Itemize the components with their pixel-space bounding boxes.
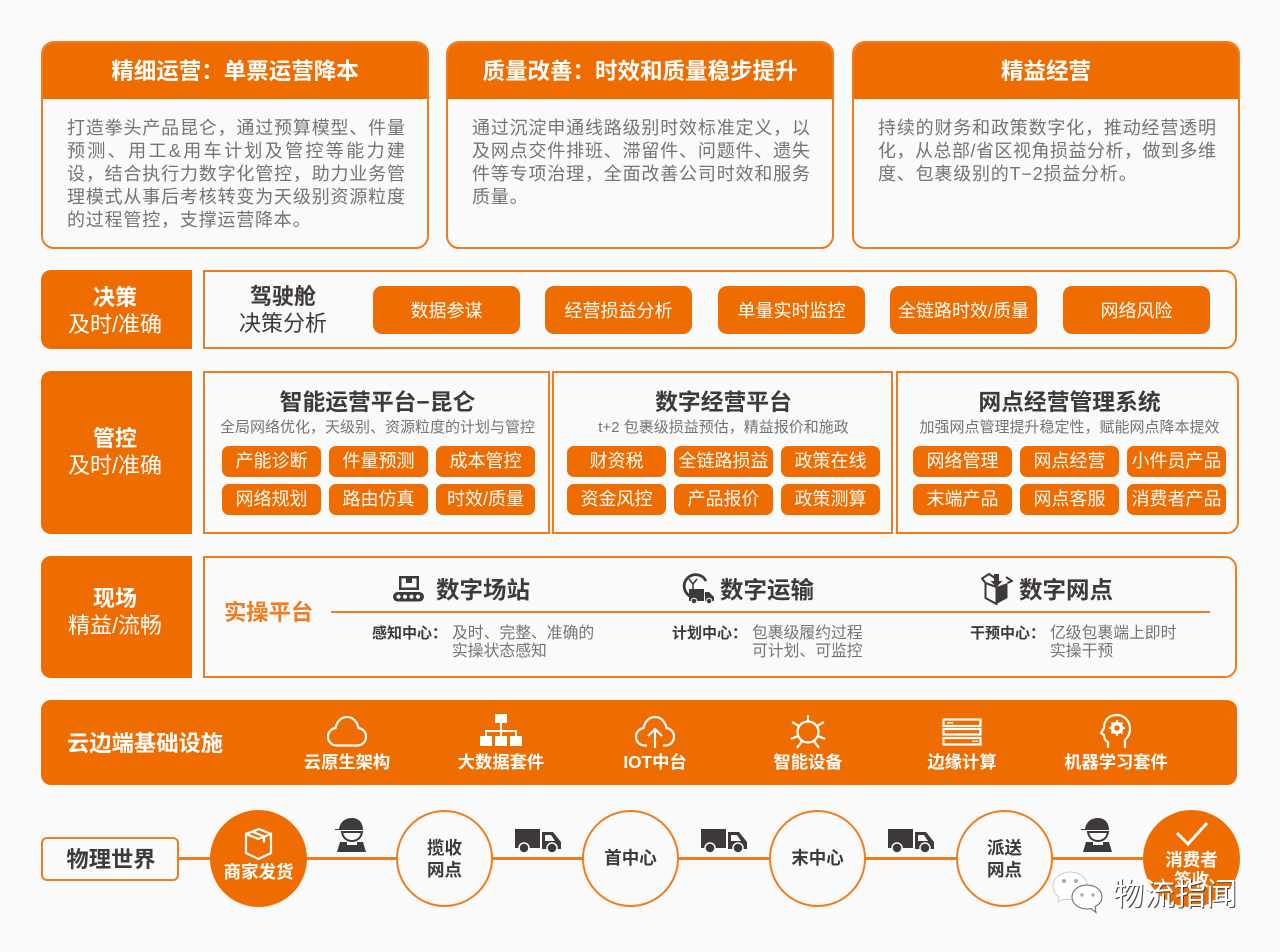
button: 财资税: 财资税 [590, 451, 644, 471]
label: 物理世界 [41, 837, 179, 881]
button: 政策测算: 政策测算 [794, 489, 866, 509]
button: 全链路时效/质量 [890, 286, 1037, 334]
button: 成本管控 [436, 446, 535, 477]
heading: 实操平台: 实操平台 [224, 600, 313, 625]
node: 揽收网点: 揽收 [427, 838, 462, 858]
button: 政策在线 [781, 446, 880, 477]
item: 云原生架构: 云原生架构 [304, 752, 390, 772]
item: 边缘计算: 边缘计算 [927, 752, 997, 772]
subtitle: 全局网络优化，天级别、资源粒度的计划与管控 [220, 418, 535, 436]
button: 产能诊断 [222, 446, 321, 477]
button: 小件员产品: 小件员产品 [1132, 451, 1222, 471]
node: 揽收网点: 网点 [427, 860, 462, 880]
row label: 管控: 及时/准确 [68, 453, 162, 478]
button: 网络规划: 网络规划 [236, 489, 308, 509]
text block: 质量改善说明: 及网点交件排班、滞留件、问题件、遗失 [472, 140, 810, 160]
node: 首中心 [582, 810, 679, 907]
heading: 数字运输: 数字运输 [720, 577, 814, 603]
node: 揽收网点 [396, 810, 493, 907]
button: 资金风控: 资金风控 [580, 489, 652, 509]
heading: 精细运营 [43, 43, 427, 99]
heading: 质量改善: 质量改善：时效和质量稳步提升 [482, 59, 798, 84]
button: 产品报价 [674, 484, 773, 515]
text block: 精细运营说明: 预测、用工&用车计划及管控等能力建 [67, 140, 405, 160]
text block: 精细运营说明: 理模式从事后考核转变为天级别资源粒度 [67, 186, 405, 206]
row label: 现场: 现场 [93, 586, 137, 611]
button: 时效/质量: 时效/质量 [447, 489, 524, 509]
button: 网络风险: 网络风险 [1100, 301, 1172, 321]
text: 感知中心: 及时、完整、准确的 [452, 625, 594, 642]
button: 经营损益分析: 经营损益分析 [564, 301, 672, 321]
text: 计划中心 [672, 624, 863, 660]
button: 消费者产品: 消费者产品 [1132, 489, 1222, 509]
heading: 数字网点: 数字网点 [1019, 577, 1113, 603]
heading: 质量改善 [448, 43, 832, 99]
panel: 实操平台 [203, 556, 1237, 678]
item: 云原生架构 [304, 716, 390, 772]
node: 末中心 [769, 810, 866, 907]
panel: 数字经营平台 [552, 371, 893, 534]
text: 感知中心: 实操状态感知 [452, 643, 547, 660]
text: 干预中心: 实操干预 [1050, 643, 1113, 660]
icon: package [244, 828, 272, 860]
icon: check mark [1176, 822, 1208, 846]
item: IOT中台 [623, 716, 687, 772]
text block: 质量改善说明: 件等专项治理，全面改善公司时效和服务 [472, 164, 810, 184]
heading: 精益经营 [854, 43, 1238, 99]
button: 路由仿真: 路由仿真 [342, 489, 414, 509]
text block: 精细运营说明 [67, 118, 405, 230]
text: 物流指闻: 物流指闻 [1113, 877, 1237, 912]
button: 数据参谋 [373, 286, 520, 334]
button: 网点客服: 网点客服 [1034, 489, 1106, 509]
panel: 质量改善 [446, 41, 834, 249]
icon: wechat [1052, 872, 1102, 914]
heading: 网点经营管理系统: 网点经营管理系统 [978, 389, 1161, 415]
item: 机器学习套件 [1064, 714, 1168, 772]
node: 首中心: 首中心 [604, 848, 657, 868]
heading: 云边端基础设施: 云边端基础设施 [67, 731, 223, 756]
panel: 驾驶舱决策分析 [203, 270, 1237, 349]
text block: 精益经营说明 [878, 118, 1216, 184]
node: 消费者签收: 签收 [1174, 870, 1209, 890]
subtitle: 加强网点管理提升稳定性，赋能网点降本提效 [919, 418, 1220, 436]
button: 政策测算 [781, 484, 880, 515]
text: 感知中心 [372, 624, 594, 660]
icon: parcel box [981, 573, 1013, 605]
button: 产能诊断: 产能诊断 [236, 451, 308, 471]
button: 网点客服 [1020, 484, 1119, 515]
icon: truck 3 [888, 829, 934, 852]
button: 时效/质量 [436, 484, 535, 515]
label: 物理世界: 物理世界 [66, 847, 156, 872]
heading: 精细运营: 精细运营：单票运营降本 [111, 59, 359, 84]
heading: 驾驶舱: 驾驶舱 [250, 284, 316, 309]
text: 干预中心: 干预中心： [970, 625, 1045, 642]
button: 财资税 [567, 446, 666, 477]
icon: courier 1 [335, 818, 366, 852]
button: 件量预测: 件量预测 [342, 451, 414, 471]
row label: 管控: 管控 [93, 426, 137, 451]
text block: 精益经营说明: 化，从总部/省区视角损益分析，做到多维 [878, 140, 1216, 160]
text: 计划中心: 包裹级履约过程 [752, 625, 863, 642]
text block: 精细运营说明: 打造拳头产品昆仑，通过预算模型、件量 [67, 118, 405, 138]
row label: 决策: 决策 [93, 285, 137, 310]
watermark: 物流指闻 [1052, 872, 1237, 914]
text: 干预中心 [970, 624, 1176, 660]
text: 计划中心: 计划中心： [672, 625, 747, 642]
icon: delivery clock [682, 573, 714, 604]
node: 商家发货: 商家发货 [224, 862, 294, 882]
icon: conveyor [393, 576, 424, 602]
subtitle: t+2 包裹级损益预估，精益报价和施政 [598, 418, 849, 436]
node: 末中心: 末中心 [791, 848, 844, 868]
text block: 质量改善说明: 质量。 [472, 186, 528, 206]
button: 件量预测 [329, 446, 428, 477]
button: 全链路损益 [674, 446, 773, 477]
row label: 管控 [41, 371, 192, 534]
button: 数据参谋: 数据参谋 [410, 301, 482, 321]
panel: 精细运营 [41, 41, 429, 249]
text: 感知中心: 感知中心： [372, 625, 447, 642]
text block: 精细运营说明: 的过程管控，支撑运营降本。 [67, 210, 311, 230]
icon: truck 2 [701, 829, 747, 852]
node: 派送网点: 派送 [987, 838, 1022, 858]
heading: 精益经营: 精益经营 [1001, 59, 1091, 84]
text: 计划中心: 可计划、可监控 [752, 643, 863, 660]
button: 单量实时监控 [718, 286, 865, 334]
row label: 决策: 及时/准确 [68, 312, 162, 337]
button: 全链路时效/质量: 全链路时效/质量 [898, 301, 1029, 321]
heading: 智能运营平台-昆仑: 智能运营平台−昆仑 [280, 389, 475, 415]
button: 网络管理: 网络管理 [926, 451, 998, 471]
heading: 数字场站: 数字场站 [436, 577, 530, 603]
item: 机器学习套件: 机器学习套件 [1064, 752, 1168, 772]
button: 政策在线: 政策在线 [794, 451, 866, 471]
button: 末端产品 [913, 484, 1012, 515]
row label: 现场 [41, 556, 192, 678]
button: 网络风险 [1063, 286, 1210, 334]
button: 经营损益分析 [545, 286, 692, 334]
button: 网络规划 [222, 484, 321, 515]
button: 网络管理 [913, 446, 1012, 477]
button: 网点经营: 网点经营 [1034, 451, 1106, 471]
text block: 质量改善说明: 通过沉淀申通线路级别时效标准定义，以 [472, 118, 810, 138]
button: 路由仿真 [329, 484, 428, 515]
item: 智能设备: 智能设备 [773, 752, 843, 772]
text block: 质量改善说明 [472, 118, 810, 206]
heading: 数字经营平台: 数字经营平台 [655, 389, 792, 415]
text block: 精细运营说明: 设，结合执行力数字化管控，助力业务管 [67, 164, 405, 184]
icon: courier 2 [1081, 818, 1112, 852]
text: 干预中心: 亿级包裹端上即时 [1050, 625, 1176, 642]
button: 小件员产品 [1127, 446, 1226, 477]
button: 资金风控 [567, 484, 666, 515]
text block: 精益经营说明: 持续的财务和政策数字化，推动经营透明 [878, 118, 1216, 138]
button: 消费者产品 [1127, 484, 1226, 515]
button: 网点经营 [1020, 446, 1119, 477]
panel: 精益经营 [852, 41, 1240, 249]
panel: 云边端基础设施 [41, 700, 1237, 785]
panel: 网点经营管理系统 [896, 371, 1239, 534]
button: 全链路损益: 全链路损益 [678, 451, 768, 471]
button: 产品报价: 产品报价 [688, 489, 760, 509]
heading: 决策分析: 决策分析 [239, 311, 327, 336]
node: 消费者签收: 消费者 [1165, 850, 1218, 870]
button: 末端产品: 末端产品 [926, 489, 998, 509]
button: 单量实时监控: 单量实时监控 [738, 301, 846, 321]
node: 商家发货 [210, 810, 307, 907]
node: 派送网点: 网点 [987, 860, 1022, 880]
button: 成本管控: 成本管控 [450, 451, 522, 471]
item: IOT中台: IOT中台 [623, 752, 687, 772]
item: 大数据套件: 大数据套件 [458, 752, 544, 772]
node: 派送网点 [956, 810, 1053, 907]
item: 智能设备 [773, 715, 843, 772]
node: 消费者签收 [1143, 810, 1240, 907]
row label: 现场: 精益/流畅 [68, 613, 162, 638]
row label: 决策 [41, 270, 192, 349]
item: 大数据套件 [458, 714, 544, 772]
panel: 智能运营平台 [203, 371, 550, 534]
text block: 精益经营说明: 度、包裹级别的T−2损益分析。 [878, 164, 1138, 184]
item: 边缘计算 [927, 718, 997, 772]
icon: truck 1 [515, 829, 561, 852]
